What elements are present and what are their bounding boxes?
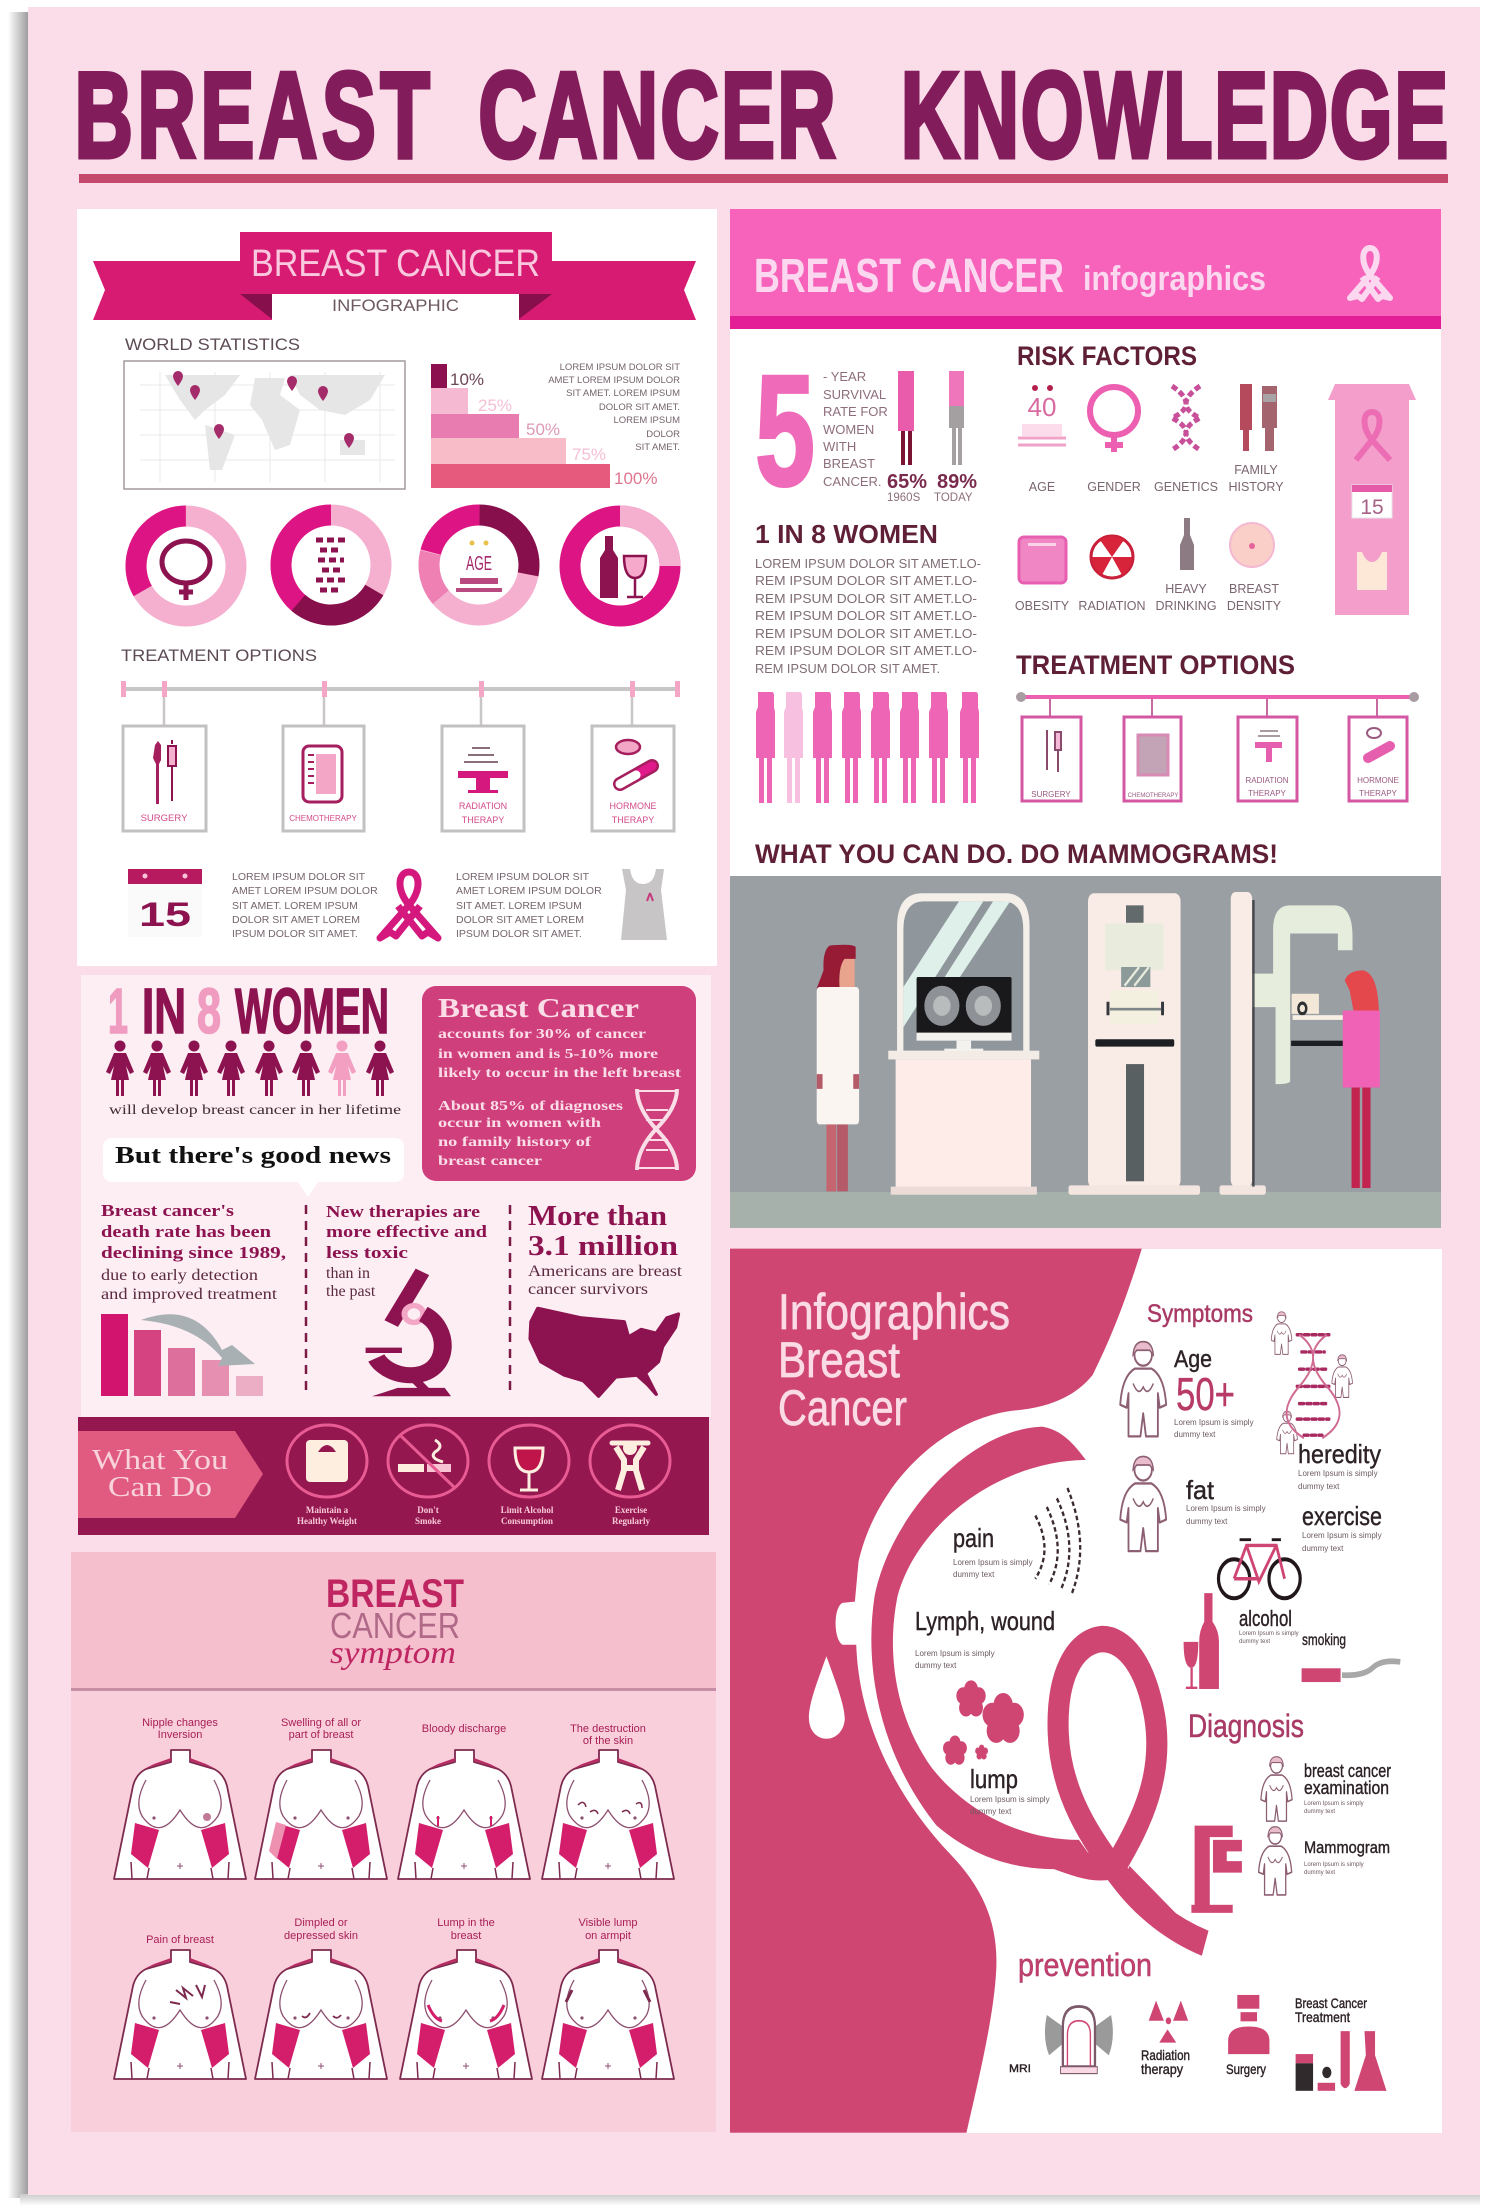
five-year survival block: 65% — [887, 471, 927, 493]
five-year survival block: TODAY — [934, 492, 973, 504]
card: hormone therapy — [592, 726, 674, 831]
mirror and monitor desk — [888, 893, 1039, 1195]
person: mammogram — [1259, 1827, 1292, 1895]
text: death rate: due to early detection — [101, 1267, 258, 1284]
panel: header breast cancer infographics: BREAST CANCER — [754, 250, 1064, 303]
symptom labels: Dimpled or — [294, 1917, 348, 1929]
icon: weights — [590, 1425, 670, 1497]
lorem text: left: IPSUM DOLOR SIT AMET. — [232, 928, 358, 940]
lorem text: statistics: LOREM IPSUM DOLOR SIT — [560, 362, 680, 373]
icon: ribbon — [380, 872, 438, 938]
card: radiation therapy right — [1238, 717, 1297, 801]
icon: calendar — [128, 869, 202, 937]
icon: pain waves — [1035, 1488, 1080, 1593]
text: survivors: More than — [528, 1200, 667, 1232]
text: new therapies: less toxic — [326, 1243, 409, 1262]
lorem text: statistics: AMET LOREM IPSUM DOLOR — [548, 375, 680, 386]
icon: microscope — [366, 1272, 451, 1396]
card: radiation therapy right: RADIATION — [1246, 776, 1289, 785]
band: what you can do: Can Do — [108, 1471, 212, 1503]
card: breast cancer facts: in women and is 5-10% more — [438, 1047, 658, 1062]
action labels — [297, 1505, 650, 1526]
stair chart: 75% — [572, 445, 606, 464]
five-year survival block: CANCER. — [823, 474, 882, 489]
action labels: Exercise — [615, 1505, 647, 1515]
icon: calendar: 15 — [139, 896, 191, 934]
symptom labels right: fat — [1186, 1475, 1215, 1505]
action labels: Regularly — [612, 1516, 650, 1526]
text: death rate: declining since 1989, — [101, 1243, 286, 1262]
lorem text: right: SIT AMET. LOREM IPSUM — [456, 900, 582, 912]
text: new therapies: the past — [326, 1283, 376, 1300]
donut: age — [409, 495, 549, 635]
card: breast cancer facts: Breast Cancer — [438, 993, 639, 1023]
symptom labels right: heredity — [1298, 1439, 1381, 1469]
mammography machine side — [1220, 892, 1353, 1195]
lorem text: statistics: SIT AMET. LOREM IPSUM — [566, 388, 680, 399]
section headings: Symptoms — [1147, 1300, 1253, 1328]
text: survivors: 3.1 million — [528, 1230, 678, 1262]
small captions: dummy text — [1302, 1544, 1344, 1553]
figure: today survival — [949, 371, 964, 465]
heading: 1 in 8 women condensed — [108, 975, 389, 1047]
icon: MRI — [1045, 2006, 1113, 2074]
panel: 1 in 8 women — [78, 975, 711, 1535]
small captions: dummy text — [1186, 1517, 1228, 1526]
labels: risk row two: RADIATION — [1078, 599, 1146, 613]
five-year survival block: WOMEN — [823, 422, 874, 437]
small captions: dummy text — [1304, 1870, 1335, 1876]
text: death rate: Breast cancer's — [101, 1201, 234, 1220]
section headings — [1018, 1300, 1304, 1983]
droplet — [809, 1656, 845, 1739]
card: breast cancer facts: breast cancer — [438, 1154, 542, 1169]
symptom labels: Nipple changes — [142, 1717, 218, 1729]
symptom labels: Lump in the — [437, 1917, 495, 1929]
heading: breast cancer symptom — [326, 1572, 464, 1670]
symptom labels right: Radiation — [1141, 2047, 1190, 2063]
labels: risk row one: AGE — [1029, 480, 1055, 494]
lorem text: women: REM IPSUM DOLOR SIT AMET. — [755, 661, 940, 676]
donut: gender — [118, 498, 254, 634]
text: new therapies — [326, 1202, 488, 1300]
lorem text: statistics: DOLOR SIT AMET. — [599, 402, 680, 413]
panel: mammogram scene — [730, 876, 1441, 1228]
icon: surgeon — [1228, 1995, 1269, 2054]
icon: scale — [287, 1425, 367, 1497]
panel: header breast cancer infographics: infographics — [1083, 260, 1266, 298]
ribbon banner: BREAST CANCER — [251, 243, 540, 285]
torso: destruction of the skin — [542, 1750, 674, 1879]
symptom labels: on armpit — [585, 1930, 631, 1942]
labels: risk row two: DRINKING — [1155, 599, 1217, 613]
action labels: Maintain a — [306, 1505, 349, 1515]
column dividers — [306, 1205, 510, 1392]
lorem text: statistics: LOREM IPSUM — [613, 415, 680, 426]
small captions: dummy text — [915, 1661, 957, 1670]
banner: ribbon, calendar, tank top: 15 — [1360, 496, 1384, 519]
five-year survival block: SURVIVAL — [823, 387, 886, 402]
small captions: Lorem Ipsum is simply — [970, 1795, 1050, 1804]
icon: wine bottle and glass — [1184, 1593, 1219, 1689]
icon: heredity people and DNA — [1271, 1312, 1352, 1454]
action labels: Limit Alcohol — [501, 1505, 554, 1515]
stair chart: 25% — [478, 396, 512, 415]
action labels: Consumption — [501, 1516, 553, 1526]
symptom labels right: Lymph, wound — [915, 1606, 1055, 1636]
card: breast cancer facts — [422, 986, 696, 1181]
heading: infographics breast cancer: Cancer — [778, 1380, 907, 1436]
heading: breast cancer symptom: CANCER — [330, 1605, 460, 1646]
breast silhouette — [730, 1249, 1142, 2133]
labels: risk row two: HEAVY — [1165, 582, 1207, 596]
symptom labels right: Mammogram — [1304, 1838, 1390, 1857]
icon: treatment kit — [1296, 2031, 1387, 2091]
panel: breast cancer symptom — [71, 1552, 716, 2132]
card: chemotherapy right: CHEMOTHERAPY — [1128, 793, 1178, 799]
small captions: Lorem Ipsum is simply — [1304, 1801, 1364, 1807]
card: breast cancer facts: occur in women with — [438, 1116, 601, 1131]
lorem text: statistics — [548, 362, 680, 453]
small captions: dummy text — [1239, 1639, 1270, 1645]
symptom labels right: lump — [970, 1764, 1018, 1794]
world map — [124, 361, 405, 489]
person: examination — [1261, 1757, 1292, 1821]
card: chemotherapy: CHEMOTHERAPY — [289, 814, 357, 823]
icon: obesity scale — [1019, 537, 1066, 583]
lorem text: women: REM IPSUM DOLOR SIT AMET.LO- — [755, 591, 977, 606]
icon: breast density — [1230, 523, 1274, 567]
lorem text: women: REM IPSUM DOLOR SIT AMET.LO- — [755, 573, 977, 588]
panel: infographics breast cancer — [730, 1249, 1442, 2133]
lorem text: statistics: SIT AMET. — [635, 442, 680, 453]
ribbon banner: INFOGRAPHIC — [332, 296, 459, 315]
row of eight women figures — [756, 692, 979, 803]
symptom labels: Bloody discharge — [422, 1723, 506, 1735]
icon: family history — [1240, 384, 1277, 451]
lorem text: left — [232, 871, 378, 940]
lorem text: right: AMET LOREM IPSUM DOLOR — [456, 885, 602, 897]
heading: 1 in 8 women condensed: WOMEN — [235, 975, 389, 1047]
heading: treatment options right: TREATMENT OPTIONS — [1016, 650, 1295, 680]
card: surgery right — [1022, 717, 1081, 801]
donut: genetics — [261, 495, 401, 635]
symptom labels: Visible lump — [578, 1917, 638, 1929]
heading: breast cancer symptom: BREAST — [326, 1572, 464, 1616]
symptom labels right: Surgery — [1226, 2061, 1266, 2077]
title underline — [79, 174, 1448, 183]
labels: risk row two: BREAST — [1229, 582, 1279, 596]
card: surgery — [123, 726, 206, 831]
symptom labels: of the skin — [583, 1735, 633, 1747]
icon: USA map — [530, 1308, 678, 1396]
icon: wine glass — [489, 1425, 569, 1497]
symptom labels right: examination — [1304, 1778, 1389, 1798]
band: what you can do — [78, 1417, 709, 1535]
five-year survival block: RATE FOR — [823, 404, 888, 419]
action labels: Smoke — [415, 1516, 441, 1526]
card: radiation therapy: RADIATION — [459, 801, 507, 811]
torso: lump in the breast — [400, 1950, 532, 2079]
card: hormone therapy right: HORMONE — [1357, 776, 1399, 785]
symptom labels right: MRI — [1009, 2063, 1031, 2075]
band: what you can do: What You — [92, 1444, 228, 1476]
heading: 1 in 8 women: 1 IN 8 WOMEN — [755, 519, 938, 549]
small captions: Lorem Ipsum is simply — [1302, 1531, 1382, 1540]
text: new therapies: New therapies are — [326, 1202, 481, 1221]
arrow: decline — [141, 1314, 255, 1366]
text: new therapies: more effective and — [326, 1222, 488, 1241]
five-year survival block: 89% — [937, 471, 977, 493]
icon: gender — [1090, 387, 1138, 452]
lorem text: left: AMET LOREM IPSUM DOLOR — [232, 885, 378, 897]
mammography machine front — [1069, 893, 1200, 1195]
five-year survival block: WITH — [823, 439, 856, 454]
card: breast cancer facts: accounts for 30% of cancer — [438, 1027, 646, 1042]
speech bubble good news — [103, 1138, 404, 1197]
card: radiation therapy right: THERAPY — [1248, 789, 1287, 798]
five-year survival block: - YEAR — [823, 369, 866, 384]
small captions: dummy text — [1304, 1809, 1335, 1815]
torso: nipple changes — [114, 1750, 246, 1879]
symptom labels: Inversion — [158, 1729, 202, 1741]
small captions: Lorem Ipsum is simply — [1304, 1862, 1364, 1868]
lorem text: right: LOREM IPSUM DOLOR SIT — [456, 871, 590, 883]
heading: breast cancer symptom: symptom — [330, 1634, 456, 1670]
labels: risk row one: GENDER — [1087, 480, 1141, 494]
section headings: Diagnosis — [1188, 1708, 1304, 1744]
heading: treatment options: TREATMENT OPTIONS — [121, 646, 317, 665]
card: hormone therapy right: THERAPY — [1359, 789, 1398, 798]
title: CANCER — [479, 46, 836, 183]
card: hormone therapy: HORMONE — [610, 801, 656, 811]
panel: breast cancer infographic — [77, 209, 717, 966]
torso: dimpled skin — [255, 1950, 387, 2079]
icon: lumps — [943, 1680, 1024, 1765]
text: new therapies: than in — [326, 1265, 370, 1282]
section headings: prevention — [1018, 1947, 1152, 1983]
symptom labels: part of breast — [289, 1729, 353, 1741]
labels: risk row two — [1015, 582, 1282, 613]
lorem text: right — [456, 871, 602, 940]
heading: 1 in 8 women condensed: IN — [142, 975, 186, 1047]
hanger rail — [121, 681, 680, 725]
card: hormone therapy: THERAPY — [612, 815, 654, 825]
small captions: Lorem Ipsum is simply — [915, 1649, 995, 1658]
icon: genetics — [1172, 386, 1200, 450]
labels: risk row one — [1029, 463, 1284, 494]
symptom labels right — [915, 1346, 1391, 2077]
pink ribbon — [871, 1427, 1205, 1943]
figure: 1960s survival — [898, 371, 914, 465]
lorem text: left: SIT AMET. LOREM IPSUM — [232, 900, 358, 912]
icon: cigarette — [1302, 1661, 1400, 1682]
figure: doctor — [817, 945, 859, 1191]
small captions: Lorem Ipsum is simply — [953, 1558, 1033, 1567]
icon: bottle — [1180, 518, 1194, 570]
symptom labels: depressed skin — [284, 1930, 358, 1942]
symptom labels: Pain of breast — [146, 1934, 214, 1946]
card: radiation therapy — [442, 726, 524, 831]
labels: risk row one: FAMILY — [1234, 463, 1278, 477]
symptom labels right: smoking — [1302, 1632, 1346, 1649]
eight women icons — [106, 1040, 394, 1096]
donut: age: AGE — [466, 553, 492, 575]
five-year survival block: BREAST — [823, 456, 875, 471]
heading: what you can do: WHAT YOU CAN DO. DO MAMMOGRAMS! — [755, 839, 1278, 869]
card: radiation therapy: THERAPY — [462, 815, 504, 825]
icon: mammography machine — [1191, 1826, 1242, 1913]
card: chemotherapy right — [1124, 717, 1181, 801]
symptom labels right: Treatment — [1295, 2009, 1350, 2025]
card: breast cancer facts: no family history of — [438, 1135, 591, 1150]
lorem text: women: REM IPSUM DOLOR SIT AMET.LO- — [755, 626, 977, 641]
symptom labels — [142, 1717, 646, 1946]
action labels: Healthy Weight — [297, 1516, 357, 1526]
stair chart: 100% — [614, 469, 657, 488]
labels: risk row two: OBESITY — [1015, 599, 1070, 613]
symptom labels right: alcohol — [1239, 1606, 1292, 1631]
symptom labels right: exercise — [1302, 1501, 1382, 1531]
person: fat — [1120, 1456, 1166, 1551]
heading: risk factors: RISK FACTORS — [1017, 341, 1197, 371]
stair chart — [431, 364, 657, 488]
panel: header breast cancer infographics — [730, 209, 1441, 876]
small captions: Lorem Ipsum is simply — [1239, 1631, 1299, 1637]
speech bubble good news: But there's good news — [115, 1143, 391, 1169]
small captions: Lorem Ipsum is simply — [1298, 1469, 1378, 1478]
hanger rail right — [1016, 692, 1419, 716]
labels: risk row one: GENETICS — [1154, 480, 1218, 494]
action labels: Don't — [417, 1505, 439, 1515]
lorem text: right: IPSUM DOLOR SIT AMET. — [456, 928, 582, 940]
symptom labels: The destruction — [570, 1723, 646, 1735]
banner: ribbon, calendar, tank top — [1328, 384, 1416, 615]
torso: pain of breast — [114, 1950, 246, 2079]
icon: radiation trefoil — [1149, 2001, 1188, 2043]
symptom labels right: pain — [953, 1523, 994, 1553]
five-year survival block: 1960S — [887, 492, 921, 504]
person: age — [1120, 1342, 1166, 1436]
text: death rate: and improved treatment — [101, 1286, 278, 1303]
heading: infographics breast cancer: Infographics — [778, 1284, 1010, 1340]
text: survivors — [528, 1200, 683, 1298]
caption: will develop breast cancer in her lifetime — [109, 1103, 401, 1118]
text: survivors: cancer survivors — [528, 1281, 648, 1298]
icon: tank top — [621, 869, 667, 940]
heading: 1 in 8 women condensed: 8 — [197, 975, 221, 1047]
lorem text: women: REM IPSUM DOLOR SIT AMET.LO- — [755, 643, 977, 658]
title: BREAST — [75, 46, 430, 183]
card: breast cancer facts: likely to occur in the left breast — [438, 1066, 681, 1081]
small captions: dummy text — [1298, 1482, 1340, 1491]
heading: infographics breast cancer: Breast — [778, 1332, 900, 1388]
icon: DNA — [637, 1089, 677, 1170]
lorem text: left: DOLOR SIT AMET LOREM — [232, 914, 360, 926]
small captions: Lorem Ipsum is simply — [1174, 1418, 1254, 1427]
torso: bloody discharge — [398, 1750, 530, 1879]
icon: age: 40 — [1028, 392, 1056, 422]
card: chemotherapy — [283, 726, 364, 831]
small captions: dummy text — [970, 1807, 1012, 1816]
lorem text: left: LOREM IPSUM DOLOR SIT — [232, 871, 366, 883]
card: breast cancer facts: About 85% of diagnoses — [438, 1099, 624, 1114]
heading: 1 in 8 women condensed: 1 — [108, 975, 128, 1047]
heading: infographics breast cancer — [778, 1284, 1010, 1436]
text: death rate: death rate has been — [101, 1222, 272, 1241]
symptom labels right: Breast Cancer — [1295, 1995, 1367, 2011]
card: surgery: SURGERY — [141, 813, 188, 824]
symptom labels right: Age — [1174, 1346, 1212, 1373]
icon: no smoking — [388, 1425, 468, 1497]
torso: swelling — [255, 1750, 387, 1879]
donut: alcohol — [570, 516, 670, 616]
symptom labels right: breast cancer — [1304, 1761, 1391, 1781]
small captions: Lorem Ipsum is simply — [1186, 1504, 1266, 1513]
torso: visible lump armpit — [542, 1950, 674, 2079]
labels: risk row two: DENSITY — [1227, 599, 1282, 613]
stair chart: 10% — [450, 370, 484, 389]
symptom labels right: 50+ — [1176, 1368, 1235, 1420]
title — [75, 46, 1448, 183]
figure: patient — [1343, 970, 1380, 1188]
lorem text: women: REM IPSUM DOLOR SIT AMET.LO- — [755, 608, 977, 623]
stair chart: 50% — [526, 420, 560, 439]
symptom labels: breast — [451, 1930, 481, 1942]
icon: age — [1018, 385, 1066, 445]
bar chart: declining death rate — [101, 1314, 263, 1396]
lorem text: right: DOLOR SIT AMET LOREM — [456, 914, 584, 926]
card: surgery right: SURGERY — [1031, 790, 1071, 799]
five-year survival block: 5 — [755, 343, 815, 519]
title: KNOWLEDGE — [901, 46, 1448, 183]
small captions: dummy text — [953, 1570, 995, 1579]
card: hormone therapy right — [1349, 717, 1407, 801]
symptom labels right: therapy — [1141, 2061, 1183, 2077]
heading: world statistics: WORLD STATISTICS — [125, 335, 300, 354]
five-year survival block — [755, 343, 977, 519]
text: death rate — [101, 1201, 286, 1303]
icon: radiation — [1091, 536, 1133, 578]
symptom labels: Swelling of all or — [281, 1717, 361, 1729]
small captions — [915, 1418, 1382, 1876]
lorem text: statistics: DOLOR — [646, 429, 680, 440]
lorem text: women: LOREM IPSUM DOLOR SIT AMET.LO- — [755, 556, 981, 571]
labels: risk row one: HISTORY — [1228, 480, 1284, 494]
icon: white ribbon — [1350, 248, 1390, 299]
lorem text: women — [755, 556, 981, 676]
ribbon banner — [93, 232, 696, 322]
icon: bicycle — [1218, 1540, 1300, 1598]
small captions: dummy text — [1174, 1430, 1216, 1439]
text: survivors: Americans are breast — [528, 1263, 683, 1280]
